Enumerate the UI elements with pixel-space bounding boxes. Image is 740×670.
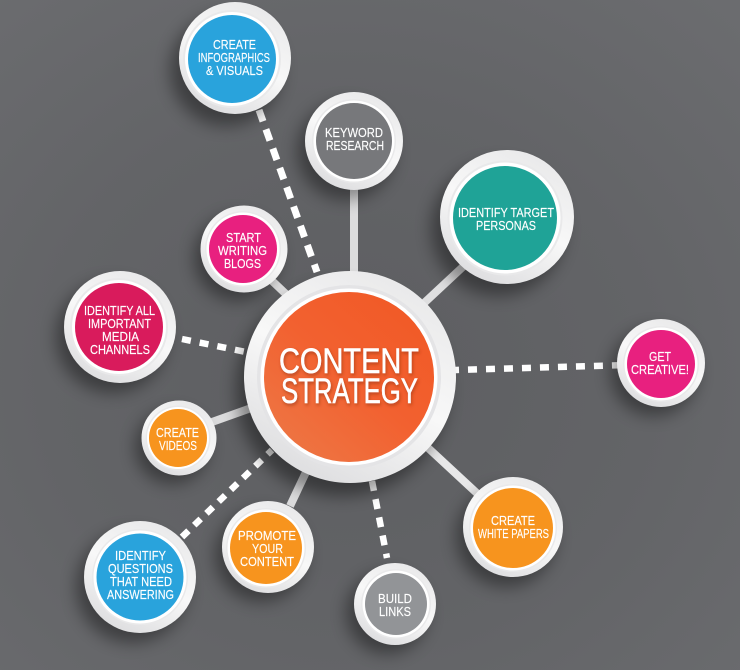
- label: CREATE: [156, 425, 199, 440]
- label: & VISUALS: [206, 63, 263, 78]
- label: YOUR: [252, 541, 283, 556]
- label: WHITE PAPERS: [478, 526, 549, 541]
- label: IMPORTANT: [88, 316, 151, 331]
- label: [238, 528, 296, 569]
- label: [156, 425, 199, 453]
- dashed connector: identify all media channels: [182, 339, 246, 352]
- node: identify target personas: [431, 150, 574, 296]
- node: identify questions that need answering: [76, 521, 196, 643]
- label: MEDIA: [102, 329, 139, 344]
- label: START: [226, 230, 261, 245]
- label: THAT NEED: [110, 574, 172, 589]
- label: KEYWORD: [325, 125, 383, 140]
- node: create white papers: [456, 477, 563, 587]
- node: create infographics and visuals: [170, 2, 291, 126]
- label: RESEARCH: [326, 138, 384, 153]
- connector: create white papers: [426, 446, 481, 497]
- label: [631, 349, 689, 377]
- title: [279, 342, 419, 411]
- dashed connector: identify questions: [182, 450, 272, 537]
- label: BUILD: [378, 591, 412, 606]
- label: [218, 230, 267, 271]
- node: promote your content: [215, 501, 314, 602]
- node: identify all important media channels: [56, 271, 176, 393]
- label: PERSONAS: [476, 218, 536, 233]
- label: CREATIVE!: [631, 362, 689, 377]
- label: [458, 205, 554, 233]
- label: [84, 303, 155, 357]
- connector: create videos: [212, 407, 254, 422]
- label: WRITING: [218, 243, 267, 258]
- title: CONTENT: [279, 342, 419, 381]
- label: ANSWERING: [107, 587, 174, 602]
- label: VIDEOS: [159, 438, 197, 453]
- label: QUESTIONS: [108, 561, 173, 576]
- label: PROMOTE: [238, 528, 296, 543]
- label: LINKS: [379, 604, 411, 619]
- node: keyword research: [297, 92, 403, 200]
- title: STRATEGY: [281, 372, 418, 411]
- connector: identify target personas: [423, 263, 467, 304]
- label: [325, 125, 384, 153]
- node: start writing blogs: [194, 206, 288, 301]
- label: [378, 591, 412, 619]
- label: CONTENT: [240, 554, 294, 569]
- label: GET: [649, 349, 671, 364]
- dashed connector: get creative: [450, 365, 620, 370]
- label: [107, 548, 174, 602]
- node: create videos: [135, 400, 216, 484]
- central hub: content strategy: [236, 271, 456, 496]
- connector: start writing blogs: [268, 277, 288, 296]
- connector: keyword research: [350, 185, 358, 275]
- node: build links: [346, 563, 436, 654]
- label: [198, 37, 270, 78]
- label: IDENTIFY ALL: [84, 303, 155, 318]
- label: IDENTIFY: [115, 548, 166, 563]
- label: CHANNELS: [90, 342, 150, 357]
- label: CREATE: [213, 37, 256, 52]
- label: [478, 513, 549, 541]
- dashed connector: create infographics: [259, 110, 317, 272]
- label: BLOGS: [224, 256, 261, 271]
- node: get creative: [610, 319, 705, 416]
- dashed connector: build links: [372, 481, 387, 558]
- connector: promote your content: [290, 470, 307, 506]
- label: CREATE: [491, 513, 535, 528]
- label: IDENTIFY TARGET: [458, 205, 554, 220]
- label: INFOGRAPHICS: [198, 50, 270, 65]
